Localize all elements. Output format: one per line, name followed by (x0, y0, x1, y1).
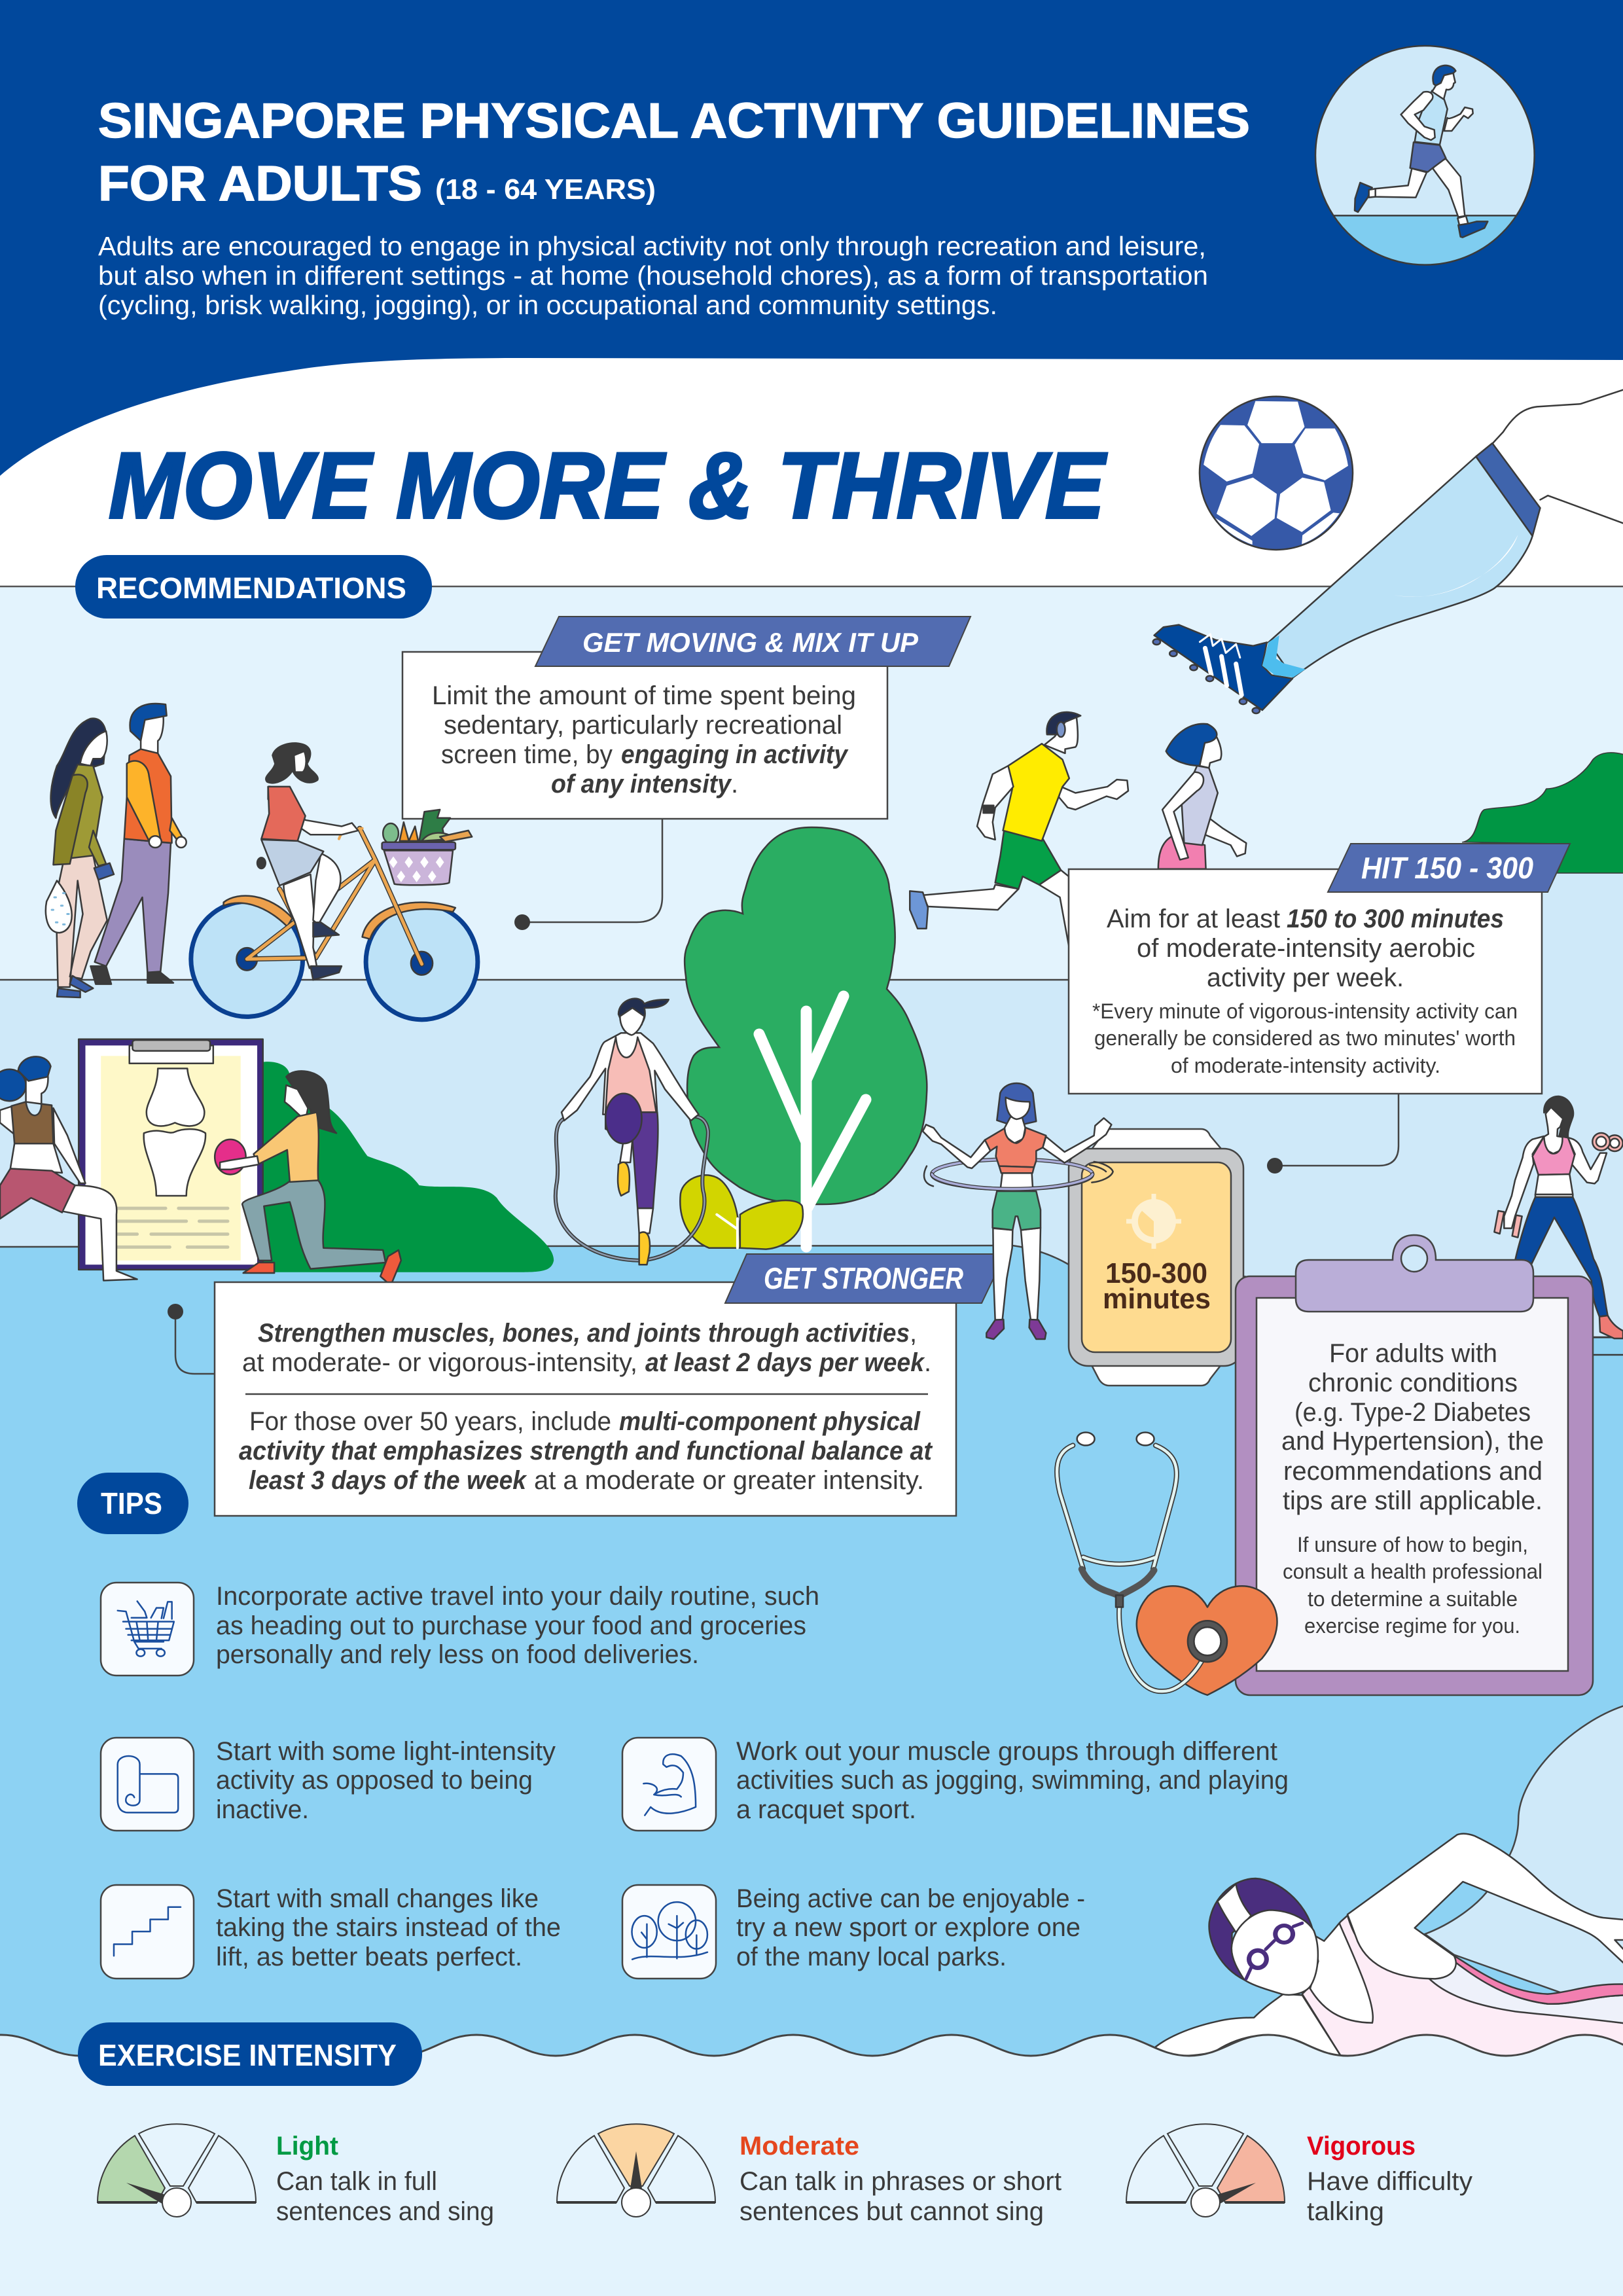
exercise intensity pill: EXERCISE INTENSITY (98, 2038, 397, 2072)
get stronger text: , (910, 1319, 917, 1348)
label: moderate: sentences but cannot sing (740, 2197, 1044, 2226)
icon: football (1200, 397, 1353, 550)
banner: hit 150-300 (1328, 844, 1570, 892)
illustration: skipping woman (556, 999, 708, 1265)
clipboard text: exercise regime for you. (1304, 1614, 1520, 1638)
tip text: of the many local parks. (736, 1943, 1007, 1971)
illustration: knee x-ray clipboard (79, 1039, 263, 1270)
get stronger text: least 3 days of the week (249, 1466, 527, 1495)
illustration: right hill (1463, 753, 1623, 873)
header intro paragraph: (cycling, brisk walking, jogging), or in occupational and community settings. (98, 290, 997, 320)
icon: flexed arm (622, 1738, 716, 1831)
clipboard text: to determine a suitable (1308, 1587, 1518, 1611)
label: vigorous (1307, 2132, 1472, 2226)
illustration: pale circle behind swimmer (1425, 1705, 1623, 2016)
get stronger text: . (924, 1348, 931, 1377)
illustration: swimmer (1150, 1834, 1623, 2060)
watch label: minutes (1103, 1283, 1211, 1315)
label: light (276, 2132, 494, 2226)
clipboard text (1281, 1339, 1544, 1638)
illustration: hula hoop woman (923, 1083, 1113, 1339)
icon: shopping cart (101, 1583, 194, 1676)
tip text (216, 1884, 561, 1971)
banner: get moving: GET MOVING & MIX IT UP (582, 627, 919, 658)
label: vigorous: Vigorous (1307, 2132, 1416, 2161)
tip text (216, 1737, 556, 1824)
background band: pale (0, 586, 1623, 982)
get stronger text: activity that emphasizes strength and functional balance at (239, 1437, 933, 1465)
header intro paragraph (98, 231, 1208, 320)
tip text: activity as opposed to being (216, 1766, 533, 1795)
panel: get moving (402, 617, 971, 819)
illustration: lunging woman (0, 1056, 137, 1280)
header intro paragraph: Adults are encouraged to engage in physical activity not only through recreation and leisure, (98, 231, 1206, 261)
illustration: running man in yellow (910, 712, 1128, 945)
tip text: Start with some light-intensity (216, 1737, 556, 1766)
recommendations pill: RECOMMENDATIONS (96, 571, 406, 605)
tip text: taking the stairs instead of the (216, 1913, 561, 1942)
watch label (1103, 1257, 1211, 1315)
tip text: Start with small changes like (216, 1884, 539, 1913)
banner: get moving (535, 617, 971, 666)
icon: stairs (101, 1885, 194, 1979)
tip text: inactive. (216, 1795, 309, 1824)
illustration: walking couple (46, 704, 187, 997)
label: light: Can talk in full (276, 2167, 437, 2196)
clipboard text: (e.g. Type-2 Diabetes (1294, 1398, 1531, 1427)
header title: SINGAPORE PHYSICAL ACTIVITY GUIDELINES (98, 93, 1250, 148)
get stronger text: at a moderate or greater intensity. (534, 1466, 924, 1495)
tip: muscle groups (622, 1737, 1289, 1831)
illustration: walking woman (1158, 724, 1246, 869)
icon: clock (1126, 1194, 1181, 1249)
connector: get stronger to bush (168, 1304, 215, 1374)
connector: hit 150-300 to watch (1267, 1094, 1399, 1174)
gauge: vigorous (1126, 2124, 1285, 2217)
banner: get stronger: GET STRONGER (764, 1261, 963, 1295)
tip: light intensity (101, 1737, 556, 1831)
main heading: MOVE MORE & THRIVE (109, 434, 1107, 538)
illustration: bush behind clipboard (261, 1062, 554, 1272)
panel: get stronger (215, 1254, 1005, 1516)
label: light: Light (276, 2132, 338, 2161)
icon: runner in circle (1309, 46, 1543, 268)
icon: exercise mat (101, 1738, 194, 1831)
illustration: yellow bush (680, 1175, 803, 1249)
illustration: kneeling woman with ball (215, 1071, 401, 1285)
clipboard text: tips are still applicable. (1283, 1486, 1543, 1515)
hit 150-300 text: Aim for at least (1107, 905, 1280, 933)
tip: small changes (101, 1884, 561, 1979)
clipboard text: If unsure of how to begin, (1297, 1533, 1528, 1556)
clipboard text: chronic conditions (1308, 1369, 1518, 1397)
icon: trees (622, 1885, 716, 1979)
hit 150-300 text: *Every minute of vigorous-intensity activity can (1092, 999, 1518, 1023)
clipboard text: For adults with (1329, 1339, 1497, 1368)
header title: (18 - 64 YEARS) (435, 173, 656, 206)
get stronger text: Strengthen muscles, bones, and joints through activities (258, 1319, 910, 1348)
illustration: stethoscope and heart (1057, 1433, 1277, 1695)
get stronger text: at moderate- or vigorous-intensity, (242, 1348, 637, 1377)
background band: sky blue (0, 1246, 1623, 2094)
tip text: try a new sport or explore one (736, 1913, 1080, 1942)
tip text: Being active can be enjoyable - (736, 1884, 1085, 1913)
illustration: smart watch (1069, 1129, 1243, 1386)
panel: clipboard chronic conditions (1236, 1235, 1593, 1695)
banner: hit 150-300: HIT 150 - 300 (1361, 851, 1533, 885)
recommendations pill (75, 555, 432, 619)
tip text (216, 1582, 819, 1669)
get moving text (432, 681, 856, 798)
gauge: moderate (557, 2124, 715, 2217)
tip text: personally and rely less on food deliveries. (216, 1640, 699, 1669)
exercise intensity pill (78, 2022, 422, 2086)
label: moderate (740, 2132, 1061, 2226)
illustration: kicking leg (1153, 390, 1623, 713)
clipboard text: consult a health professional (1283, 1560, 1543, 1583)
get stronger text: multi-component physical (619, 1407, 921, 1436)
label: light: sentences and sing (276, 2197, 494, 2226)
get moving text: engaging in activity (621, 740, 849, 769)
illustration: cyclist with basket (191, 742, 478, 1020)
panel: hit 150-300 (1069, 844, 1570, 1094)
tip text: Incorporate active travel into your daily routine, such (216, 1582, 819, 1611)
get stronger text: at least 2 days per week (645, 1348, 925, 1377)
get moving text: screen time, by (441, 740, 613, 769)
banner: get stronger (725, 1254, 1005, 1303)
white title band (0, 358, 1623, 589)
get moving text: . (731, 770, 738, 798)
get moving text: of any intensity (551, 770, 732, 798)
tip: active travel (101, 1582, 819, 1676)
tips pill: TIPS (101, 1486, 162, 1520)
label: vigorous: Have difficulty (1307, 2167, 1472, 2196)
illustration: woman with dumbbells (1494, 1096, 1623, 1355)
header title: FOR ADULTS (98, 156, 422, 211)
label: moderate: Can talk in phrases or short (740, 2167, 1061, 2196)
tip text: activities such as jogging, swimming, and playing (736, 1766, 1289, 1795)
clipboard clip (1296, 1235, 1533, 1312)
hit 150-300 text: generally be considered as two minutes' worth (1094, 1026, 1516, 1050)
hit 150-300 text: of moderate-intensity aerobic (1137, 934, 1475, 963)
tip text (736, 1884, 1085, 1971)
header intro paragraph: but also when in different settings - at home (household chores), as a form of transportation (98, 260, 1208, 291)
ground line (0, 979, 1073, 980)
tip text: a racquet sport. (736, 1795, 916, 1824)
tip: enjoyable (622, 1884, 1085, 1979)
get moving text: Limit the amount of time spent being (432, 681, 856, 710)
hit 150-300 text: of moderate-intensity activity. (1171, 1054, 1440, 1077)
tip text (736, 1737, 1289, 1824)
clipboard text: and Hypertension), the (1281, 1427, 1544, 1456)
water wave and bottom band (0, 2035, 1623, 2296)
tip text: as heading out to purchase your food and groceries (216, 1611, 806, 1640)
label: moderate: Moderate (740, 2132, 859, 2161)
get moving text: sedentary, particularly recreational (444, 711, 842, 740)
gauge: light (98, 2124, 256, 2217)
hit 150-300 text (1092, 905, 1518, 1077)
header background (0, 0, 1623, 497)
hit 150-300 text: activity per week. (1207, 963, 1404, 992)
illustration: tree (685, 827, 927, 1247)
get stronger text (239, 1319, 933, 1495)
watch label: 150-300 (1105, 1257, 1207, 1289)
tips pill (77, 1473, 188, 1534)
header title (98, 93, 1250, 211)
hit 150-300 text: 150 to 300 minutes (1287, 905, 1504, 933)
label: vigorous: talking (1307, 2197, 1384, 2226)
tip text: Work out your muscle groups through different (736, 1737, 1277, 1766)
tip text: lift, as better beats perfect. (216, 1943, 522, 1971)
get stronger text: For those over 50 years, include (249, 1407, 611, 1436)
background band: light blue (0, 873, 1623, 1374)
clipboard text: recommendations and (1283, 1457, 1543, 1486)
connector: get moving to cyclist (514, 819, 662, 930)
